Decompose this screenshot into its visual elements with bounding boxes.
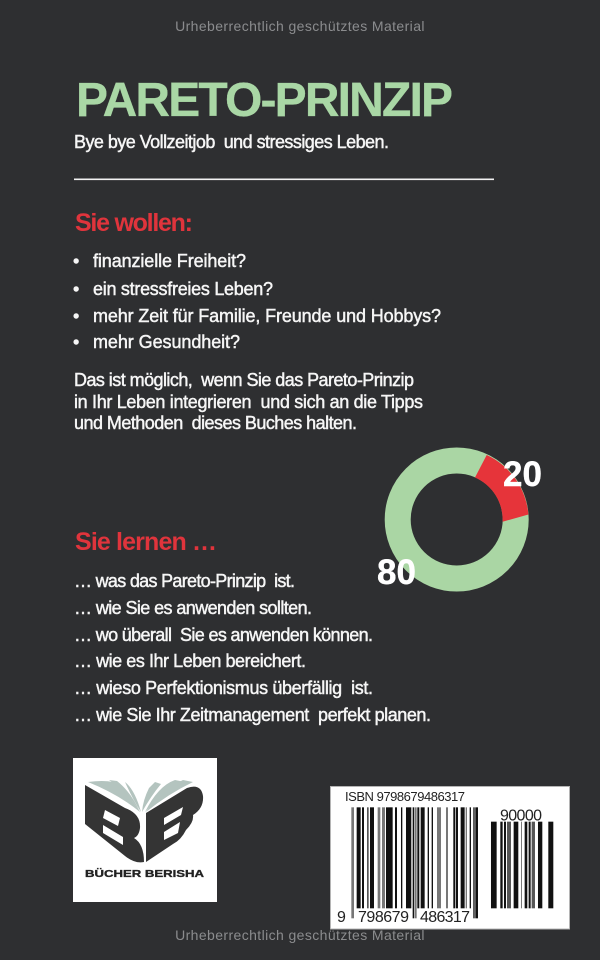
- title: PARETO-PRINZIP: [76, 74, 453, 127]
- list: wants: mehr Gesundheit?: [93, 332, 240, 352]
- list: wants: [73, 251, 441, 352]
- list: learn: … wo überall Sie es anwenden können.: [74, 625, 373, 645]
- list: learn: … wieso Perfektionismus überfällig ist.: [74, 678, 373, 698]
- paragraph: Das ist möglich, wenn Sie das Pareto-Prinzip: [74, 370, 414, 390]
- list: wants: •: [73, 279, 79, 299]
- addon bars: [491, 822, 553, 908]
- logo letters BB: [85, 785, 203, 862]
- list: learn: [74, 571, 431, 725]
- divider: [74, 178, 494, 180]
- list: learn: … wie es Ihr Leben bereichert.: [74, 651, 306, 671]
- logo letter holes: [103, 807, 183, 845]
- logo wordmark: BÜCHER BERISHA: [85, 867, 205, 880]
- paragraph: in Ihr Leben integrieren und sich an die Tipps: [74, 392, 423, 412]
- label 80: 80: [377, 553, 416, 592]
- addon number: 90000: [500, 808, 542, 824]
- publisher logo: [73, 758, 217, 902]
- bottom watermark: Urheberrechtlich geschütztes Material: [175, 927, 425, 943]
- donut chart: [377, 448, 542, 592]
- heading: Sie lernen: Sie lernen …: [75, 528, 217, 556]
- list: learn: … wie Sie es anwenden sollten.: [74, 598, 312, 618]
- list: wants: •: [73, 332, 79, 352]
- isbn text: ISBN 9798679486317: [345, 789, 465, 804]
- paragraph: und Methoden dieses Buches halten.: [74, 413, 357, 433]
- list: wants: mehr Zeit für Familie, Freunde und Hobbys?: [93, 306, 441, 326]
- donut ring green: [398, 460, 516, 578]
- list: wants: finanzielle Freiheit?: [93, 251, 246, 271]
- heading: Sie wollen: Sie wollen:: [75, 209, 193, 237]
- list: wants: •: [73, 306, 79, 326]
- top watermark: Urheberrechtlich geschütztes Material: [175, 18, 425, 34]
- list: wants: ein stressfreies Leben?: [93, 279, 273, 299]
- list: learn: … wie Sie Ihr Zeitmanagement perfekt planen.: [74, 705, 431, 725]
- donut segment red: [475, 455, 528, 522]
- digits group 1: 798679: [358, 909, 409, 926]
- list: wants: •: [73, 251, 79, 271]
- digits group 2: 486317: [420, 909, 470, 926]
- paragraph: [74, 370, 423, 433]
- main text layer: [73, 74, 494, 726]
- main bars: [351, 807, 478, 918]
- barcode: [330, 786, 570, 930]
- label 20: 20: [503, 455, 542, 494]
- logo pages fan: [88, 780, 193, 812]
- digit 9: 9: [337, 909, 346, 926]
- list: learn: … was das Pareto-Prinzip ist.: [74, 571, 295, 591]
- subtitle: Bye bye Vollzeitjob und stressiges Leben.: [74, 132, 389, 152]
